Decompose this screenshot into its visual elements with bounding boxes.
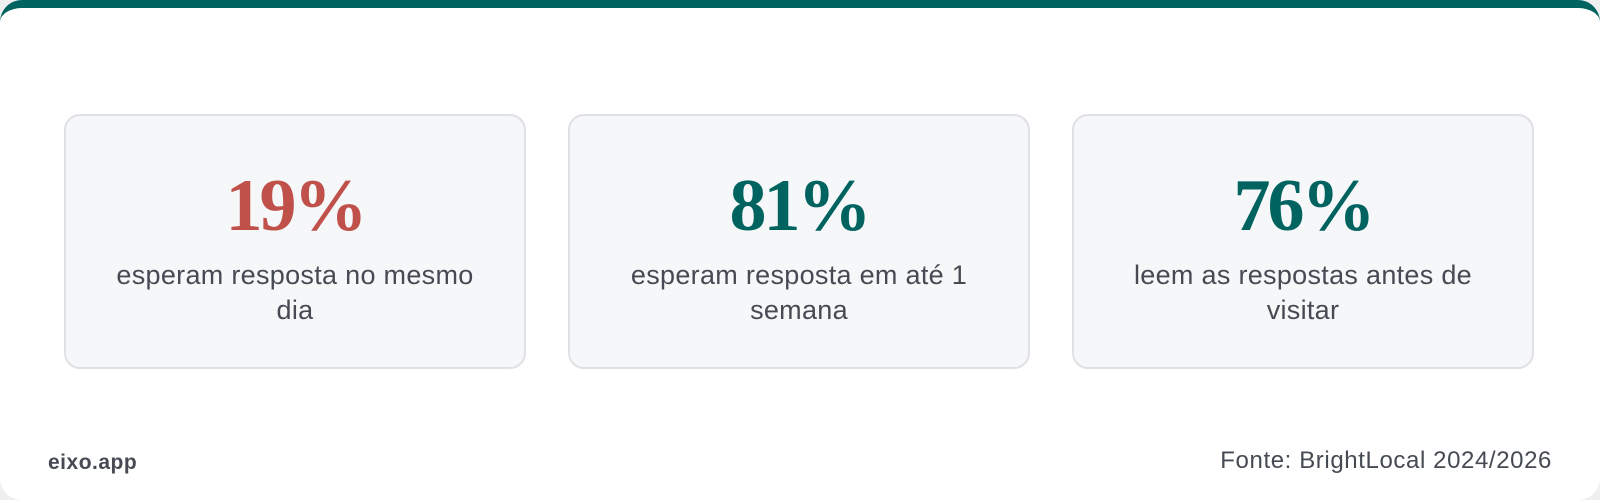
stat number: 81%	[730, 165, 868, 247]
card: read replies	[1072, 114, 1534, 369]
footer brand: eixo.app	[48, 451, 137, 474]
footer source: Fonte: BrightLocal 2024/2026	[1220, 447, 1552, 474]
label: leem as respostas antes de visitar	[1134, 260, 1472, 325]
card: one week	[568, 114, 1030, 369]
label: esperam resposta no mesmo dia	[116, 260, 474, 325]
stat number: 19%	[226, 165, 364, 247]
card: same day	[64, 114, 526, 369]
stat number: 76%	[1234, 165, 1372, 247]
label: esperam resposta em até 1 semana	[631, 260, 967, 325]
